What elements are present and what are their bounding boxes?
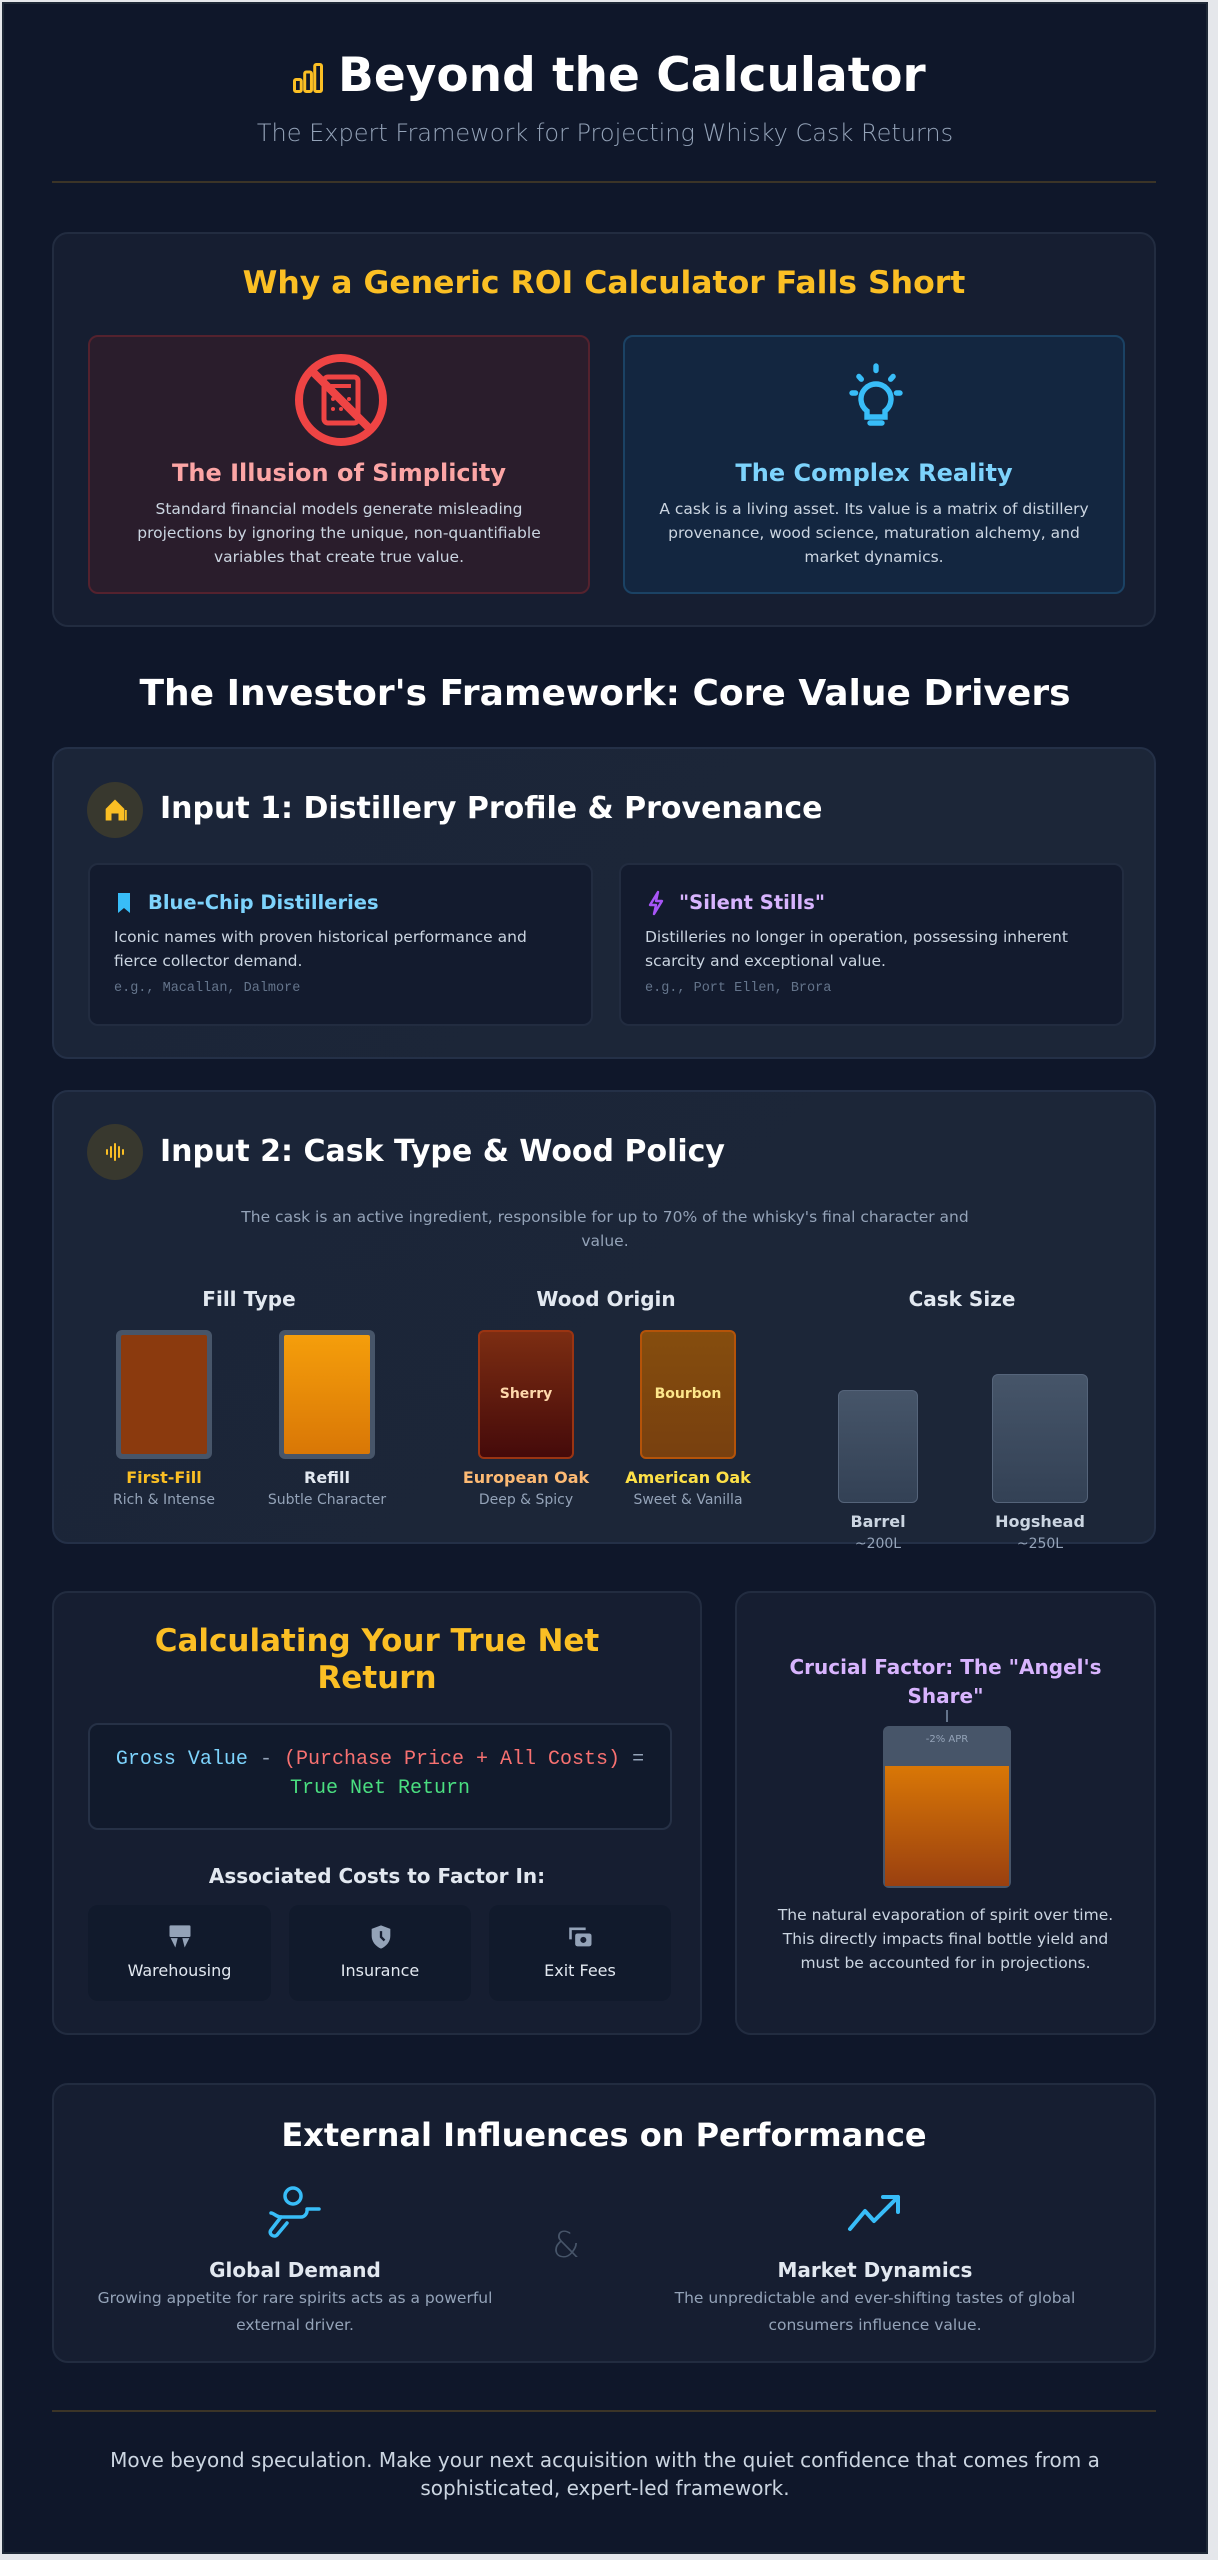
text: global demand: Growing appetite for rare spirits acts as a powerful external driver. bbox=[98, 2289, 492, 2334]
label: hogshead bbox=[995, 1512, 1085, 1552]
label: european oak: European Oak bbox=[463, 1468, 589, 1487]
chart: evaporating cask bbox=[883, 1710, 1011, 1888]
cost: insurance bbox=[289, 1905, 471, 2001]
card title: "Silent Stills" bbox=[679, 891, 825, 914]
examples: e.g., Macallan, Dalmore bbox=[114, 981, 300, 996]
cost: exit fees: Exit Fees bbox=[544, 1961, 616, 1980]
label: refill: Subtle Character bbox=[268, 1492, 386, 1508]
card text: A cask is a living asset. Its value is a matrix of distillery provenance, wood science, maturation alchemy, and market dynamics. bbox=[659, 500, 1089, 566]
ampersand: & bbox=[552, 2225, 580, 2266]
cask: hogshead bbox=[992, 1374, 1088, 1503]
section heading: framework: The Investor's Framework: Core Value Drivers bbox=[139, 673, 1071, 714]
costs heading: Associated Costs to Factor In: bbox=[209, 1864, 545, 1888]
cost: warehousing bbox=[88, 1905, 271, 2001]
label: american oak: Sweet & Vanilla bbox=[633, 1492, 743, 1508]
chart: evaporating cask: -2% APR bbox=[926, 1734, 968, 1745]
label: american oak bbox=[625, 1468, 751, 1508]
card text: Distilleries no longer in operation, possessing inherent scarcity and exceptional value. bbox=[645, 928, 1068, 970]
card title: The Illusion of Simplicity bbox=[172, 459, 506, 487]
panel: external influences bbox=[52, 2083, 1156, 2363]
footer text: Move beyond speculation. Make your next acquisition with the quiet confidence that comes from a sophisticated, expert-led framework. bbox=[110, 2448, 1100, 2500]
panel heading: Return bbox=[317, 1660, 437, 1696]
panel: angel's share bbox=[735, 1591, 1156, 2035]
card: silent stills bbox=[619, 863, 1124, 1026]
icon: market dynamics bbox=[848, 2194, 900, 2232]
icon: no calculator bbox=[295, 354, 387, 446]
panel heading: External Influences on Performance bbox=[281, 2116, 927, 2154]
cask: first-fill bbox=[116, 1330, 212, 1459]
panel heading bbox=[155, 1623, 599, 1696]
label: first-fill bbox=[113, 1468, 215, 1508]
label: refill: Refill bbox=[304, 1468, 350, 1487]
icon: bolt bbox=[648, 890, 664, 916]
subtitle: The Expert Framework for Projecting Whisky Cask Returns bbox=[257, 119, 953, 147]
icon: bookmark bbox=[118, 893, 130, 913]
examples: e.g., Port Ellen, Brora bbox=[645, 981, 831, 996]
panel heading: Why a Generic ROI Calculator Falls Short bbox=[243, 265, 965, 301]
icon: light bulb bbox=[849, 363, 903, 426]
cask: sherry bbox=[478, 1330, 574, 1459]
icon: wood grain bbox=[87, 1124, 143, 1180]
card title: The Complex Reality bbox=[735, 459, 1013, 487]
cask: sherry: Sherry bbox=[500, 1386, 552, 1402]
panel heading: Crucial Factor: The "Angel's Share" bbox=[789, 1655, 1102, 1708]
label: refill bbox=[268, 1468, 386, 1508]
description: The cask is an active ingredient, responsible for up to 70% of the whisky's final character and value. bbox=[241, 1208, 969, 1250]
panel: true net return bbox=[52, 1591, 702, 2035]
title: Beyond the Calculator bbox=[338, 48, 926, 103]
column heading: cask size: Cask Size bbox=[909, 1287, 1015, 1311]
formula box: True Net Return bbox=[290, 1777, 470, 1800]
cost: insurance: Insurance bbox=[341, 1961, 419, 1980]
header icon: bar chart bbox=[293, 63, 323, 93]
column heading: fill type: Fill Type bbox=[202, 1287, 296, 1311]
label: barrel: ~200L bbox=[855, 1536, 901, 1552]
cask: bourbon bbox=[640, 1330, 736, 1459]
label: european oak: Deep & Spicy bbox=[479, 1492, 573, 1508]
label: first-fill: Rich & Intense bbox=[113, 1492, 215, 1508]
text: global demand bbox=[98, 2258, 492, 2334]
icon: global demand bbox=[268, 2186, 321, 2238]
card text: Standard financial models generate misleading projections by ignoring the unique, non-quantifiable variables that create true value. bbox=[137, 500, 541, 566]
formula box bbox=[88, 1723, 672, 1830]
icon: distillery bbox=[87, 782, 143, 838]
panel: input 1 bbox=[52, 747, 1156, 1059]
description: The natural evaporation of spirit over time. This directly impacts final bottle yield and must be accounted for in projections. bbox=[778, 1906, 1113, 1972]
cask: bourbon: Bourbon bbox=[655, 1386, 721, 1402]
text: market dynamics: Market Dynamics bbox=[778, 2258, 972, 2282]
label: hogshead: Hogshead bbox=[995, 1512, 1085, 1531]
card text: Iconic names with proven historical performance and fierce collector demand. bbox=[114, 928, 527, 970]
text: global demand: Global Demand bbox=[209, 2258, 381, 2282]
label: european oak bbox=[463, 1468, 590, 1508]
panel: input 2 bbox=[52, 1090, 1156, 1544]
text: market dynamics: The unpredictable and ever-shifting tastes of global consumers influence value. bbox=[675, 2289, 1075, 2334]
card: complex reality bbox=[623, 335, 1125, 594]
cost: exit fees bbox=[489, 1905, 671, 2001]
formula box: Gross Value - (Purchase Price + All Costs) = bbox=[116, 1748, 644, 1771]
column heading: wood origin: Wood Origin bbox=[536, 1287, 676, 1311]
panel: why generic calculator falls short bbox=[52, 232, 1156, 627]
label: hogshead: ~250L bbox=[1017, 1536, 1063, 1552]
label: barrel bbox=[850, 1512, 906, 1552]
card: illusion of simplicity bbox=[88, 335, 590, 594]
label: american oak: American Oak bbox=[625, 1468, 751, 1487]
card: blue-chip bbox=[88, 863, 593, 1026]
panel heading: Calculating Your True Net bbox=[155, 1623, 599, 1659]
card title: Blue-Chip Distilleries bbox=[148, 891, 379, 914]
label: first-fill: First-Fill bbox=[126, 1468, 202, 1487]
cask: barrel bbox=[838, 1390, 918, 1503]
panel title: Input 1: Distillery Profile & Provenance bbox=[160, 791, 823, 826]
label: barrel: Barrel bbox=[850, 1512, 906, 1531]
text: market dynamics bbox=[674, 2258, 1075, 2334]
cost: warehousing: Warehousing bbox=[128, 1961, 231, 1980]
panel title: Input 2: Cask Type & Wood Policy bbox=[160, 1134, 725, 1169]
cask: refill bbox=[279, 1330, 375, 1459]
